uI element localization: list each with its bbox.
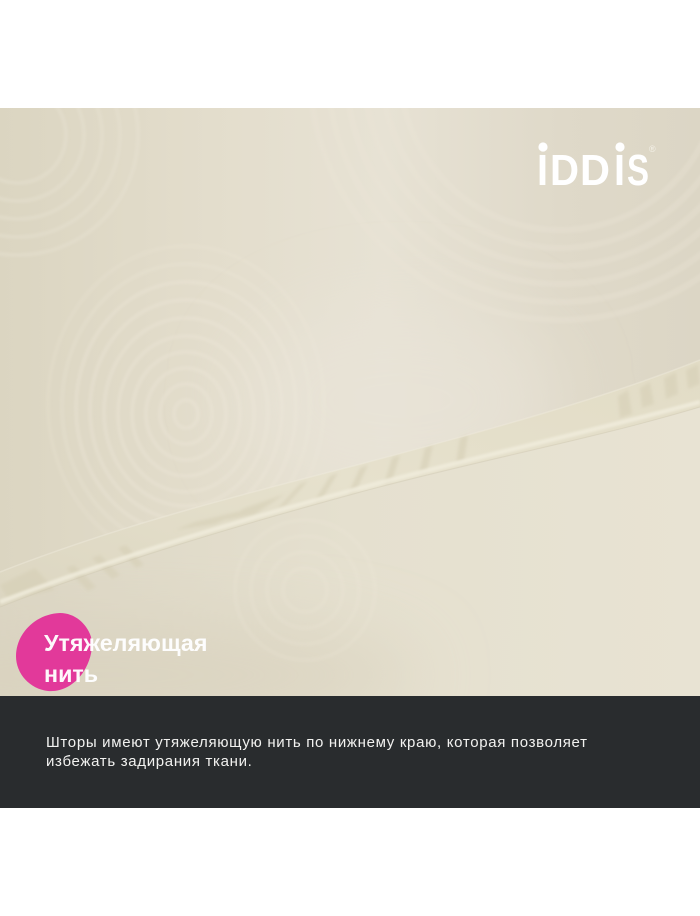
swirl pattern: lower <box>235 520 375 660</box>
photo: cream fabric with weighted hem <box>0 108 700 696</box>
body text <box>46 734 588 770</box>
logo: IDDIS: ® <box>649 144 656 154</box>
lower fabric panel <box>0 407 700 696</box>
heading <box>44 630 207 687</box>
pink accent blob <box>16 613 92 692</box>
body text: Шторы имеют утяжеляющую нить по нижнему краю, которая позволяет <box>46 734 588 751</box>
soft sheen <box>240 300 560 500</box>
heading: нить <box>44 661 98 687</box>
hem with weighted thread <box>0 360 700 607</box>
swirl pattern: top right <box>310 0 700 320</box>
lower left shading <box>0 620 420 730</box>
swirl pattern: central <box>48 246 324 562</box>
dark caption band <box>0 696 700 808</box>
logo: IDDIS <box>537 142 656 190</box>
body text: избежать задирания ткани. <box>46 753 253 770</box>
heading: Утяжеляющая <box>44 630 207 656</box>
swirl pattern: top left <box>0 15 138 255</box>
